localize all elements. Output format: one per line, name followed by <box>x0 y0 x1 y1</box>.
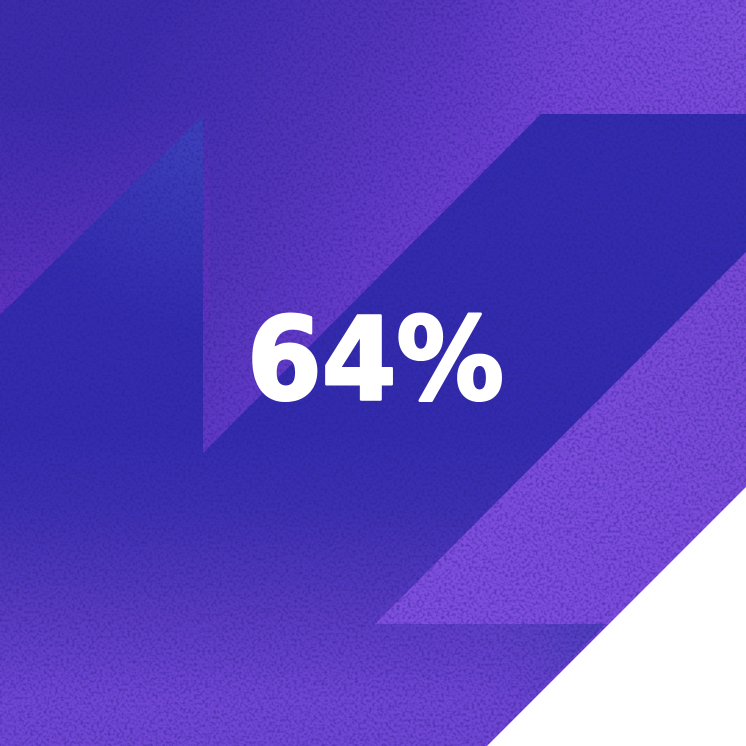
shape: light purple parallelogram <box>375 252 746 624</box>
heading: 64 percent: 64% <box>247 293 504 426</box>
shape: white bottom-right corner <box>487 487 746 746</box>
